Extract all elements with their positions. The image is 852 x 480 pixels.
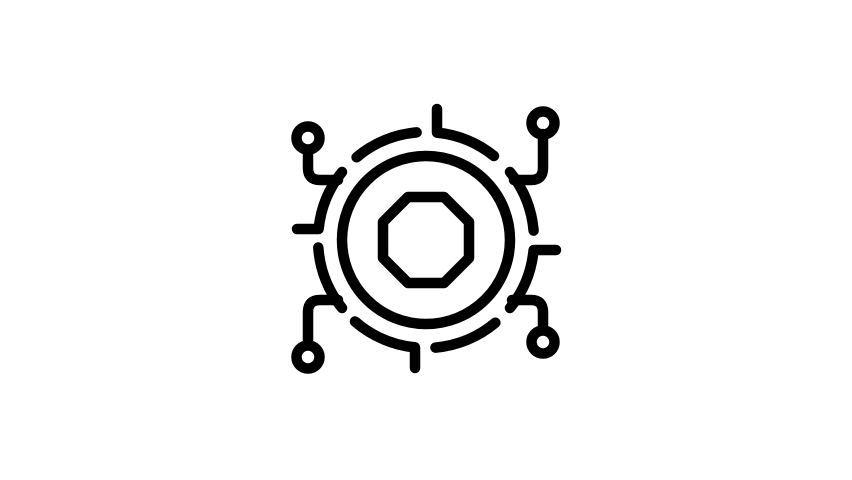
trace: top-left: [296, 126, 338, 180]
outer ring segment: top-right with stub: [437, 109, 494, 156]
outer ring segment: right-upper: [510, 172, 534, 231]
outer ring segment: bottom-left with stub: [355, 322, 415, 368]
outer ring segment: left-upper with stub: [297, 172, 342, 229]
octagon core: [383, 197, 469, 283]
trace: bottom-right: [512, 300, 554, 354]
inner circle: [342, 156, 510, 324]
outer ring segment: top-left: [357, 132, 417, 157]
outer ring segment: left-lower: [318, 248, 342, 308]
outer ring segment: bottom-right: [435, 323, 495, 348]
trace: top-right: [514, 112, 554, 180]
trace: bottom-left: [296, 300, 338, 368]
outer ring segment: right-lower with stub: [510, 250, 556, 308]
